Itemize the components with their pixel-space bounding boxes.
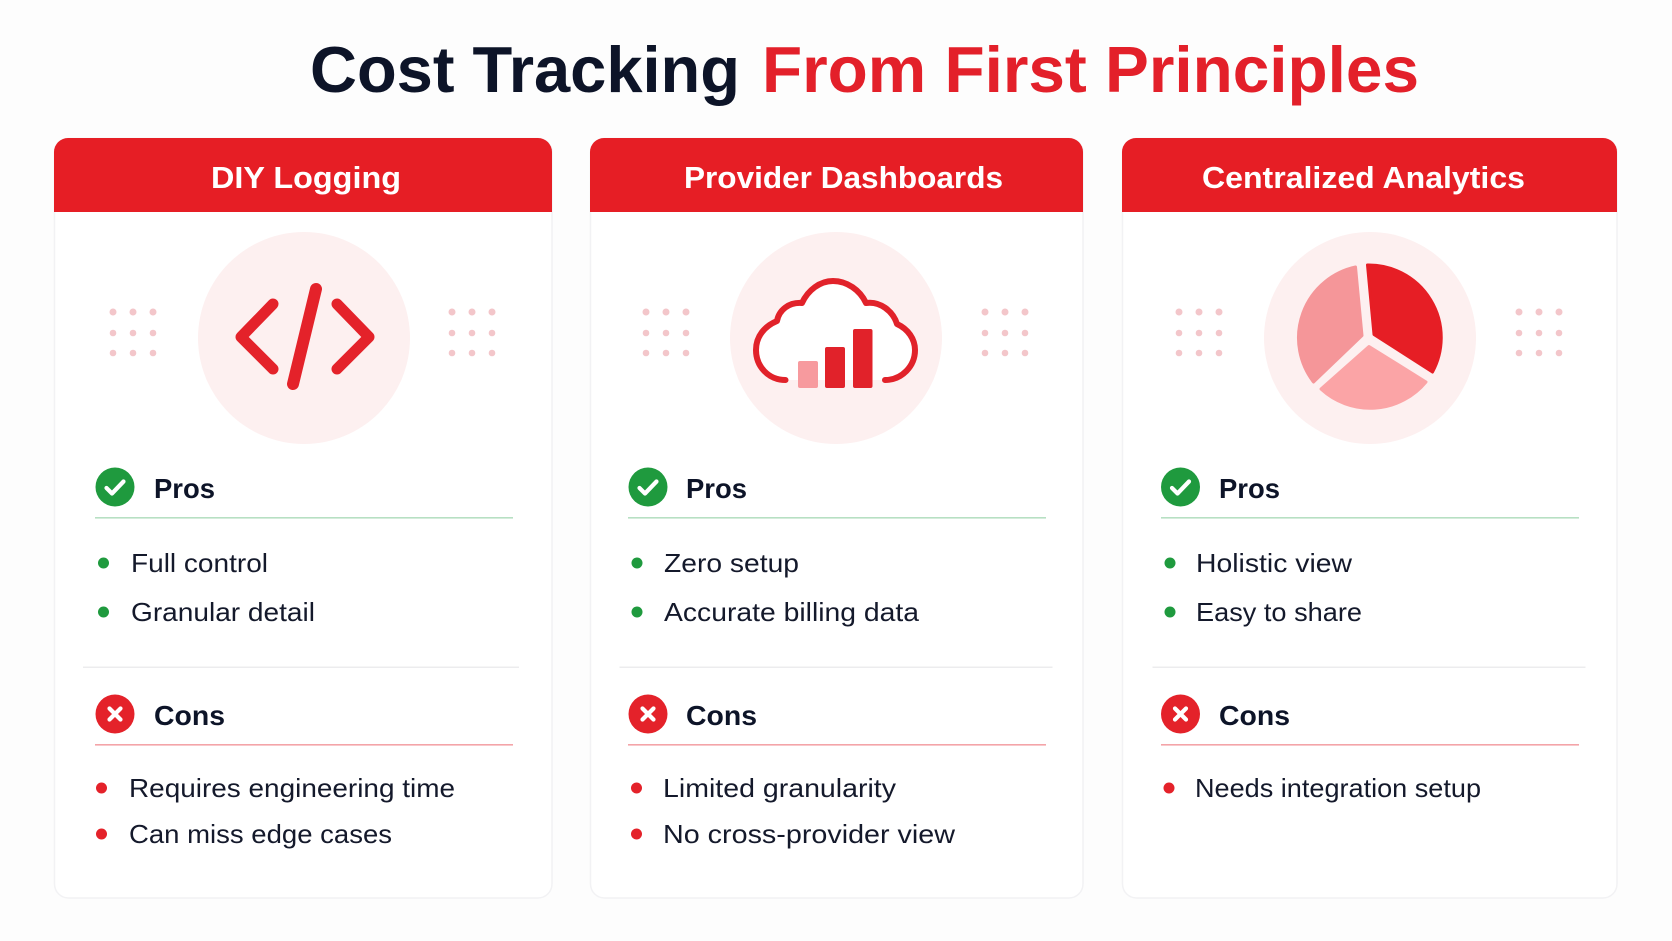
panel header: Provider Dashboards (590, 138, 1083, 212)
icon: pie chart (1264, 232, 1476, 444)
cons heading: Cons (686, 700, 757, 731)
pros heading (628, 468, 1046, 519)
panel header: DIY Logging: DIY Logging (211, 160, 401, 195)
cons heading (95, 694, 513, 746)
pros list: Holistic view (1196, 548, 1352, 578)
pros heading: Pros (1219, 473, 1280, 504)
panel header: Centralized Analytics (1122, 138, 1617, 212)
panel header: DIY Logging (54, 138, 552, 212)
cons list (631, 773, 955, 849)
cons list: Needs integration setup (1195, 773, 1481, 803)
cons heading: Cons (154, 700, 225, 731)
panel header: Provider Dashboards: Provider Dashboards (684, 160, 1003, 195)
icon: code brackets (198, 232, 410, 444)
pros list: Easy to share (1196, 597, 1362, 627)
pros heading: Pros (154, 473, 215, 504)
cons list: Can miss edge cases (129, 819, 392, 849)
pros list: Granular detail (131, 597, 315, 627)
title: Cost Tracking (310, 33, 740, 106)
cons list: Requires engineering time (129, 773, 455, 803)
icon: cloud with bars (730, 232, 942, 444)
cons heading (628, 694, 1046, 746)
cons heading: Cons (1219, 700, 1290, 731)
title: From First Principles (762, 33, 1419, 106)
cons list (96, 773, 455, 849)
cons list: Limited granularity (663, 773, 896, 803)
pros list: Full control (131, 548, 268, 578)
panel: Provider Dashboards (590, 138, 1083, 898)
pros heading (95, 468, 513, 519)
title (310, 33, 1419, 106)
panel: DIY Logging (54, 138, 552, 898)
pros heading (1161, 468, 1579, 519)
panel: Centralized Analytics (1122, 138, 1617, 898)
pros list: Zero setup (664, 548, 799, 578)
pros list: Accurate billing data (664, 597, 920, 627)
pros list (1164, 548, 1362, 627)
cons list: No cross-provider view (663, 819, 955, 849)
pros list (98, 548, 315, 627)
pros list (632, 548, 920, 627)
cons heading (1161, 694, 1579, 746)
pros heading: Pros (686, 473, 747, 504)
panel header: Centralized Analytics: Centralized Analytics (1202, 160, 1525, 195)
